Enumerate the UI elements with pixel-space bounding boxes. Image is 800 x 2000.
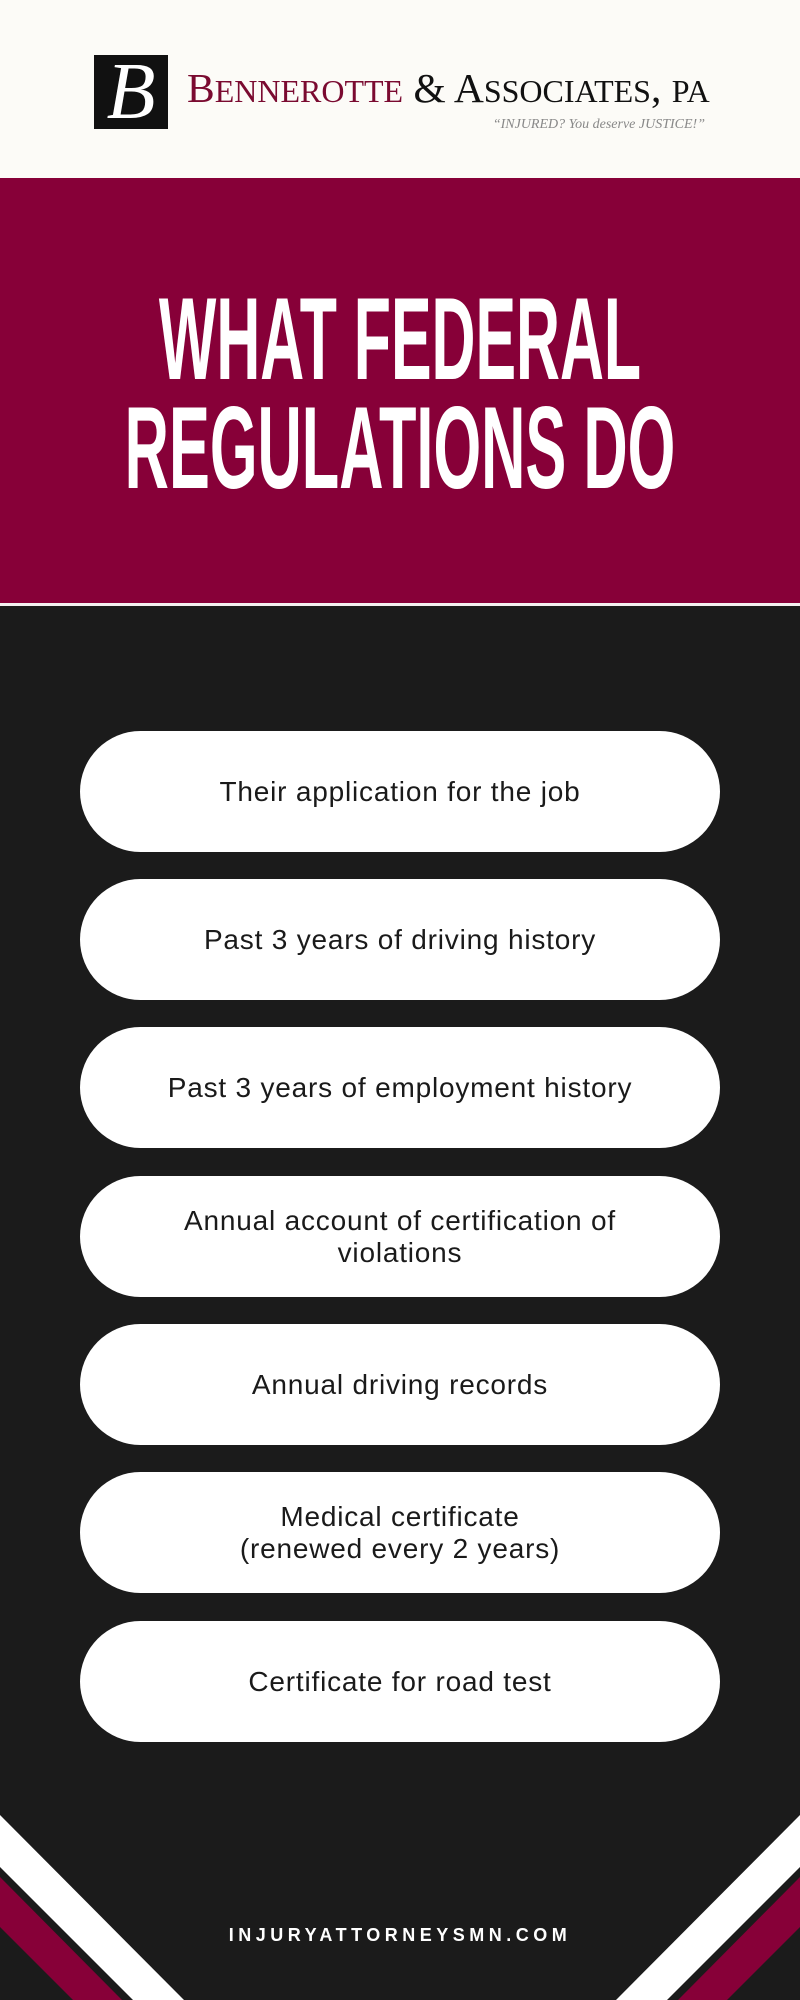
pill 2 (80, 879, 720, 1000)
pill 6: (renewed every 2 years) (240, 1532, 560, 1564)
pill 1 (80, 731, 720, 852)
title band (0, 178, 800, 603)
pill 6 (80, 1472, 720, 1593)
pill 3: Past 3 years of employment history (168, 1072, 632, 1102)
pill 1: Their application for the job (220, 776, 580, 806)
pill 3 (80, 1027, 720, 1148)
title (125, 273, 675, 513)
pill 7 (80, 1621, 720, 1742)
icon: B monogram: B (107, 48, 155, 136)
pill 7: Certificate for road test (248, 1666, 552, 1696)
title: REGULATIONS DO (125, 382, 675, 513)
pill 4 (80, 1176, 720, 1297)
pill 4: Annual account of certification of (184, 1204, 616, 1236)
icon: B monogram (94, 55, 168, 129)
pill 2: Past 3 years of driving history (204, 924, 596, 954)
pill 6: Medical certificate (280, 1500, 520, 1532)
firm name: BENNEROTTE & ASSOCIATES, PA (187, 65, 710, 111)
pill 4: violations (338, 1236, 462, 1268)
logo (94, 48, 710, 136)
title: WHAT FEDERAL (159, 273, 641, 404)
header (0, 0, 800, 178)
tagline: “INJURED? You deserve JUSTICE!” (493, 117, 705, 132)
pill 5 (80, 1324, 720, 1445)
footer url: INJURYATTORNEYSMN.COM (229, 1925, 571, 1945)
pill 5: Annual driving records (252, 1368, 548, 1400)
footer stripes (0, 1815, 800, 2000)
